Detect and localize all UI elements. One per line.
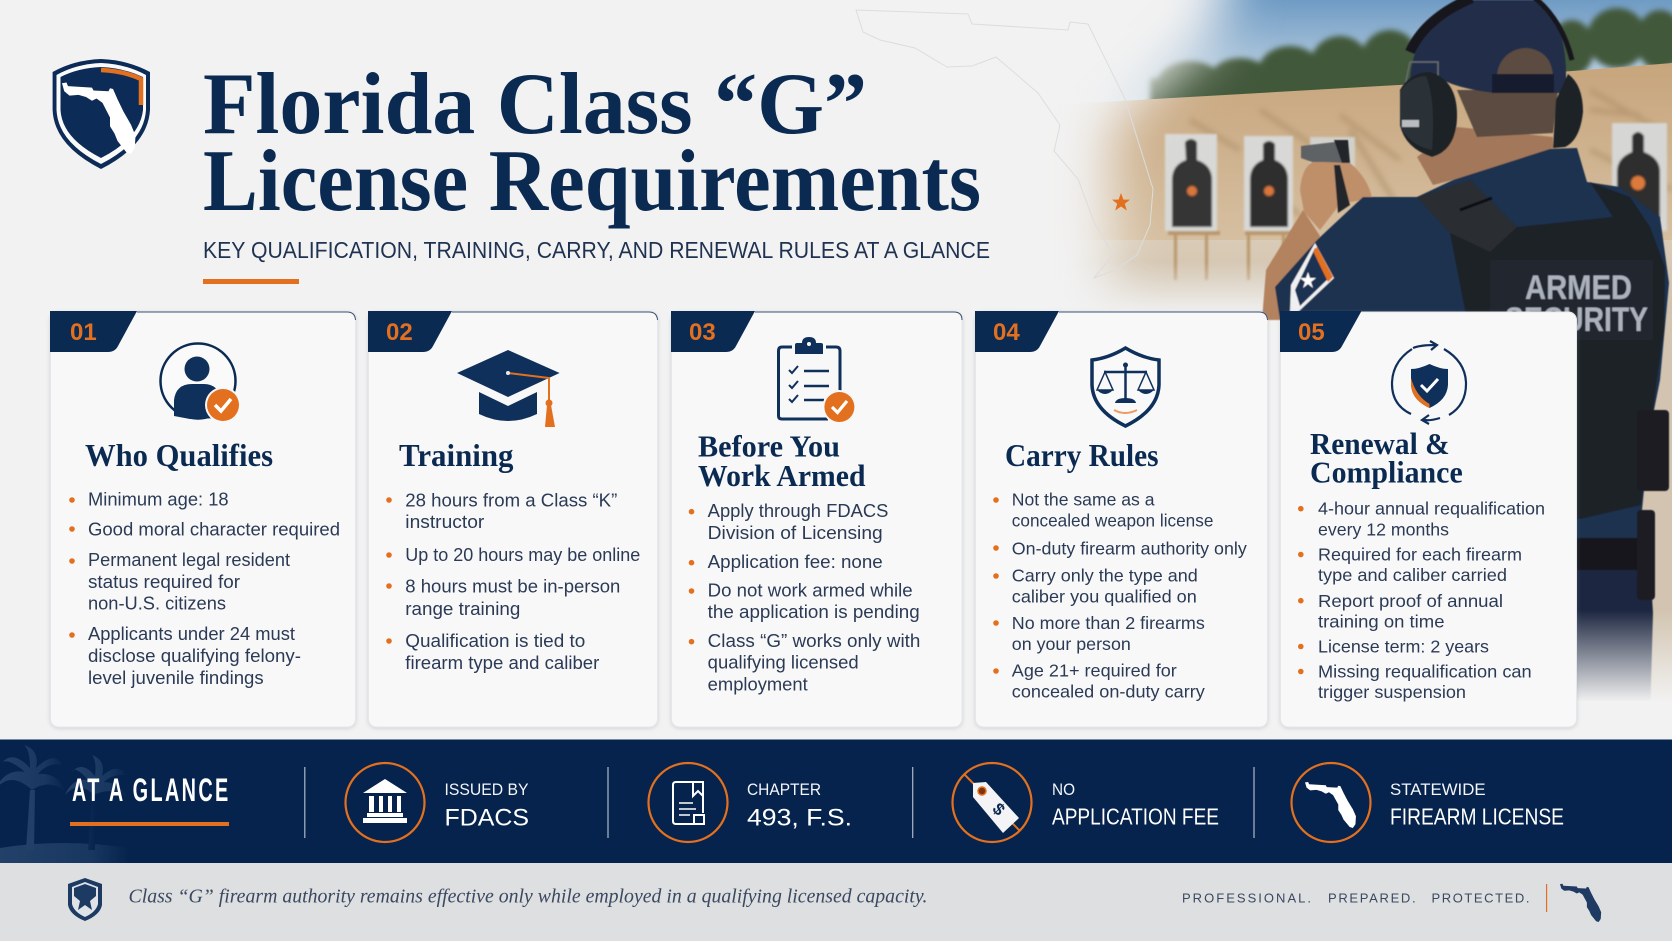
belt bbox=[1570, 538, 1645, 570]
bullet list bbox=[993, 490, 1247, 702]
pistol bbox=[1301, 140, 1349, 163]
title bbox=[203, 56, 981, 230]
panel: carry rules bbox=[975, 311, 1268, 727]
bullet list: 28 hours from a Class “K” bbox=[405, 490, 617, 510]
target 3 bbox=[1310, 137, 1355, 167]
footer tagline bbox=[1182, 890, 1530, 906]
forearm bbox=[1262, 210, 1320, 320]
target 1 bbox=[1165, 134, 1220, 280]
vest label: SECURITY bbox=[1505, 301, 1648, 339]
left ear muff bbox=[1400, 72, 1457, 157]
bullet list: Class “G” works only with bbox=[708, 631, 920, 651]
bullet list: instructor bbox=[405, 512, 484, 532]
footer strip bbox=[0, 863, 1672, 941]
heading: Work Armed bbox=[698, 458, 866, 493]
bullet list bbox=[386, 490, 640, 673]
icon: graduation cap bbox=[457, 350, 560, 427]
faint florida outline bbox=[856, 10, 1153, 278]
item: no application fee: APPLICATION FEE bbox=[1052, 804, 1219, 830]
bullet list: 8 hours must be in-person bbox=[405, 576, 620, 596]
bullet list: non-U.S. citizens bbox=[88, 594, 226, 614]
item: no application fee bbox=[952, 763, 1219, 842]
shield logo bbox=[53, 59, 150, 169]
bullet list: status required for bbox=[88, 572, 240, 592]
bullet list: on your person bbox=[1012, 634, 1131, 654]
bullet list: trigger suspension bbox=[1318, 682, 1466, 702]
footer florida icon bbox=[1560, 884, 1601, 922]
panel: renewal and compliance bbox=[1280, 311, 1576, 727]
item: chapter 493 bbox=[648, 763, 852, 842]
heading bbox=[698, 428, 866, 493]
item: no application fee: NO bbox=[1052, 780, 1075, 799]
bullet list: the application is pending bbox=[708, 602, 920, 622]
bullet list bbox=[69, 490, 340, 688]
icon: person with check bbox=[160, 344, 241, 423]
berm bbox=[1050, 63, 1672, 245]
bullet list: Carry only the type and bbox=[1012, 566, 1198, 586]
heading: Compliance bbox=[1310, 454, 1463, 490]
fade at foot of range bbox=[1040, 262, 1290, 314]
florida silhouette bbox=[62, 82, 136, 154]
item: issued by fdacs: FDACS bbox=[444, 804, 529, 832]
number tab bbox=[368, 311, 452, 352]
icon: clipboard bbox=[778, 337, 856, 424]
bullet list: Division of Licensing bbox=[708, 523, 883, 543]
tactical vest bbox=[1417, 180, 1665, 519]
number tab bbox=[50, 311, 137, 352]
number tab: 03 bbox=[689, 319, 716, 346]
subtitle: KEY QUALIFICATION, TRAINING, CARRY, AND RENEWAL RULES AT A GLANCE bbox=[203, 237, 990, 263]
item: issued by fdacs: ISSUED BY bbox=[444, 780, 528, 799]
item: chapter 493: 493, F.S. bbox=[747, 804, 852, 832]
bullet list: 4-hour annual requalification bbox=[1318, 498, 1545, 518]
title: Florida Class “G” bbox=[203, 56, 867, 153]
title accent bar bbox=[203, 279, 299, 284]
item: statewide firearm license: STATEWIDE bbox=[1390, 780, 1486, 799]
bullet list: Do not work armed while bbox=[708, 580, 913, 600]
bottom fade over photo bbox=[1565, 610, 1672, 702]
hands bbox=[1300, 160, 1372, 230]
trousers bbox=[1560, 565, 1653, 720]
heading: Renewal & bbox=[1310, 426, 1450, 461]
bullet list: concealed weapon license bbox=[1012, 510, 1213, 530]
bullet list: Applicants under 24 must bbox=[88, 624, 295, 644]
shirt bbox=[1275, 148, 1669, 545]
bullet list: type and caliber carried bbox=[1318, 565, 1507, 585]
item: chapter 493: CHAPTER bbox=[747, 780, 821, 799]
bullet list: Good moral character required bbox=[88, 520, 340, 540]
shoulder patch bbox=[1290, 243, 1334, 312]
bullet list: Apply through FDACS bbox=[708, 501, 888, 521]
vest patch bbox=[1490, 260, 1653, 340]
bullet list: Missing requalification can bbox=[1318, 662, 1532, 682]
number tab bbox=[1280, 311, 1362, 352]
bullet list: Application fee: none bbox=[708, 552, 883, 572]
bullet list: training on time bbox=[1318, 612, 1444, 632]
heading at a glance bbox=[70, 772, 229, 826]
number tab: 05 bbox=[1298, 319, 1325, 346]
guard figure bbox=[1262, 0, 1669, 720]
bullet list: every 12 months bbox=[1318, 520, 1449, 540]
vest label bbox=[1505, 269, 1648, 339]
bullet list: Report proof of annual bbox=[1318, 591, 1503, 611]
neck bbox=[1417, 127, 1553, 185]
title: License Requirements bbox=[203, 133, 981, 230]
footer note: Class “G” firearm authority remains effective only while employed in a qualifying licensed capacity. bbox=[128, 886, 928, 908]
target 2 bbox=[1244, 136, 1296, 280]
footer tagline: PROTECTED. bbox=[1432, 890, 1530, 906]
number tab: 01 bbox=[70, 319, 97, 346]
panel: training bbox=[368, 311, 658, 727]
footer tagline: PREPARED. bbox=[1328, 890, 1416, 906]
bullet list: Minimum age: 18 bbox=[88, 490, 229, 510]
bullet list: On-duty firearm authority only bbox=[1012, 538, 1247, 558]
icon: price tag bbox=[973, 782, 1019, 833]
number tab: 02 bbox=[386, 319, 413, 346]
bullet list bbox=[1298, 498, 1545, 702]
palm silhouettes bbox=[0, 745, 130, 863]
bullet list: concealed on-duty carry bbox=[1012, 682, 1205, 702]
heading: Who Qualifies bbox=[85, 437, 273, 473]
heading bbox=[1310, 426, 1463, 490]
headband bbox=[1410, 0, 1472, 52]
bullet list: Age 21+ required for bbox=[1012, 660, 1177, 680]
item: no application fee: $ bbox=[989, 799, 1009, 820]
bullet list: range training bbox=[405, 599, 520, 619]
heading: Before You bbox=[698, 428, 840, 464]
icon: florida map bbox=[1305, 782, 1356, 828]
bullet list: License term: 2 years bbox=[1318, 636, 1489, 656]
number tab: 04 bbox=[993, 319, 1020, 346]
bullet list: qualifying licensed bbox=[708, 652, 859, 672]
icon: statute book bbox=[673, 782, 703, 824]
cap bbox=[1410, 0, 1566, 93]
star marker bbox=[1112, 193, 1130, 210]
item: statewide firearm license bbox=[1292, 763, 1564, 842]
panel: before you work armed bbox=[671, 311, 962, 727]
ground bbox=[1050, 240, 1672, 315]
bullet list: disclose qualifying felony- bbox=[88, 646, 301, 666]
bullet list: caliber you qualified on bbox=[1012, 586, 1197, 606]
bullet list: employment bbox=[708, 674, 808, 694]
number tab bbox=[671, 311, 755, 352]
at a glance band bbox=[0, 740, 1672, 863]
heading: Training bbox=[399, 437, 514, 473]
panel: who qualifies bbox=[50, 311, 356, 727]
bullet list: Permanent legal resident bbox=[88, 550, 290, 570]
photo: armed guard at firing range bbox=[856, 0, 1672, 740]
bullet list bbox=[689, 501, 920, 694]
bullet list: level juvenile findings bbox=[88, 668, 264, 688]
bullet list: No more than 2 firearms bbox=[1012, 613, 1205, 633]
icon: renewal arrows and shield bbox=[1392, 341, 1466, 424]
bullet list: Up to 20 hours may be online bbox=[405, 545, 640, 565]
number tab bbox=[975, 311, 1059, 352]
bullet list: Not the same as a bbox=[1012, 490, 1155, 510]
right ear muff bbox=[1553, 74, 1583, 148]
pouches bbox=[1637, 410, 1669, 491]
heading: Carry Rules bbox=[1005, 437, 1158, 473]
bullet list: Qualification is tied to bbox=[405, 631, 585, 651]
footer shield icon bbox=[68, 878, 102, 921]
vest label: ARMED bbox=[1525, 269, 1632, 307]
bullet list: firearm type and caliber bbox=[405, 653, 599, 673]
hair bbox=[1457, 46, 1558, 137]
bullet list: Required for each firearm bbox=[1318, 544, 1522, 564]
target 4 bbox=[1612, 123, 1667, 231]
trees bbox=[1150, 8, 1672, 109]
item: issued by fdacs bbox=[346, 763, 529, 842]
item: statewide firearm license: FIREARM LICENSE bbox=[1390, 804, 1564, 830]
left fog over photo bbox=[960, 0, 1250, 360]
heading at a glance: AT A GLANCE bbox=[72, 772, 228, 808]
icon: shield with scales bbox=[1092, 348, 1159, 426]
icon: government building bbox=[363, 779, 407, 823]
footer tagline: PROFESSIONAL. bbox=[1182, 890, 1311, 906]
orange corner bbox=[101, 70, 141, 105]
